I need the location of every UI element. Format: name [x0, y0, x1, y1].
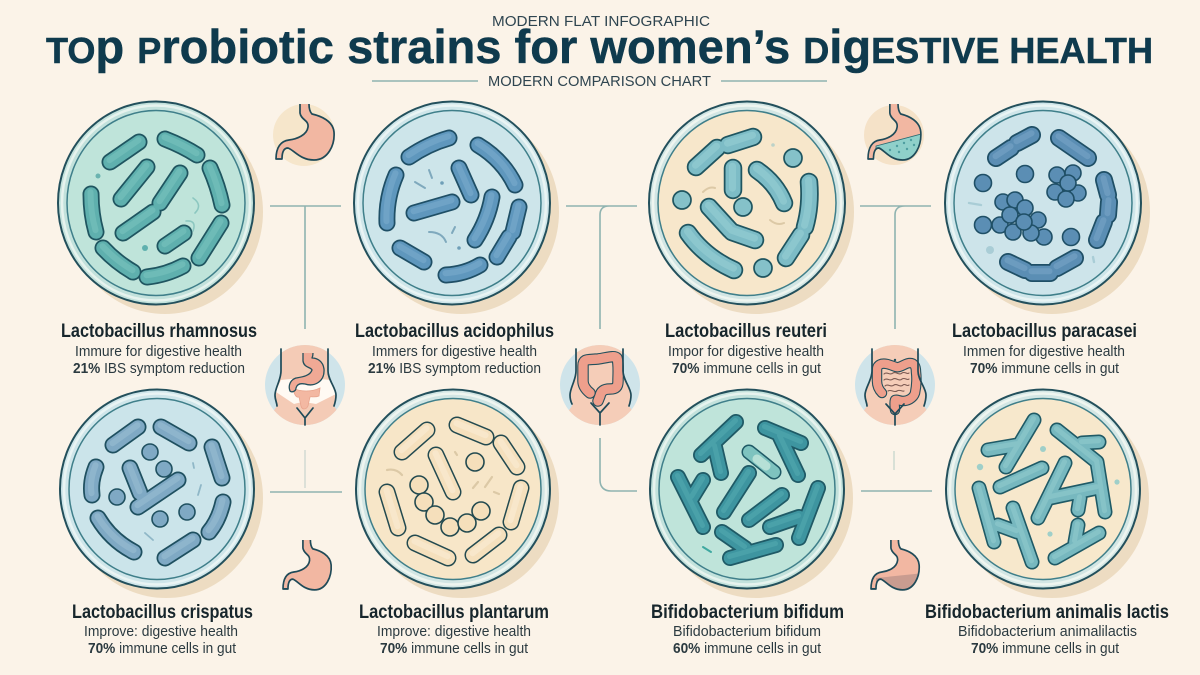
benefit text: Immers for digestive health: [372, 344, 537, 360]
small intestine: [884, 372, 909, 392]
petri dish 6: [356, 390, 559, 598]
petri dish 2: [354, 102, 559, 314]
petri dish 5: [60, 390, 263, 598]
strain name: Lactobacillus reuteri: [665, 320, 827, 342]
icon: female torso with intestines: [855, 345, 935, 426]
panel: Lactobacillus reuteri: [649, 102, 854, 377]
panel: Lactobacillus paracasei: [945, 102, 1150, 377]
petri dish 3: [649, 102, 854, 314]
statistic: 60% immune cells in gut: [673, 641, 821, 657]
panel: Bifidobacterium bifidum: [650, 390, 853, 657]
icon: stomach on beige circle: [273, 104, 335, 166]
panel: Bifidobacterium animalis lactis: [925, 390, 1169, 657]
benefit text: Impor for digestive health: [668, 344, 824, 360]
large intestine: [877, 363, 916, 410]
statistic: 70% immune cells in gut: [88, 641, 236, 657]
statistic: 21% IBS symptom reduction: [73, 361, 245, 377]
strain name: Lactobacillus acidophilus: [355, 320, 554, 342]
strain name: Lactobacillus rhamnosus: [61, 320, 257, 342]
panel: Lactobacillus crispatus: [60, 390, 263, 657]
benefit text: Immure for digestive health: [75, 344, 242, 360]
panel: Lactobacillus acidophilus: [354, 102, 559, 377]
statistic: 21% IBS symptom reduction: [368, 361, 541, 377]
strain name: Bifidobacterium bifidum: [651, 601, 844, 623]
strain name: Lactobacillus paracasei: [952, 320, 1137, 342]
benefit text: Improve: digestive health: [377, 624, 531, 640]
statistic: 70% immune cells in gut: [970, 361, 1119, 377]
petri dish 8: [946, 390, 1149, 598]
strain name: Lactobacillus plantarum: [359, 601, 549, 623]
petri dish 4: [945, 102, 1150, 314]
eyebrow text: MODERN FLAT INFOGRAPHIC: [492, 13, 710, 30]
statistic: 70% immune cells in gut: [672, 361, 821, 377]
petri dish 7: [650, 390, 853, 598]
icon: female torso with colon: [560, 345, 640, 426]
colon: [583, 357, 618, 401]
panel: Lactobacillus plantarum: [356, 390, 559, 657]
icon: female torso with stomach and uterus: [265, 345, 345, 426]
benefit text: Improve: digestive health: [84, 624, 238, 640]
uterus: [293, 388, 320, 409]
icon: stomach lower right: [870, 540, 920, 591]
statistic: 70% immune cells in gut: [380, 641, 528, 657]
statistic: 70% immune cells in gut: [971, 641, 1119, 657]
benefit text: Bifidobacterium bifidum: [673, 624, 821, 640]
subtitle with rules: MODERN COMPARISON CHART: [488, 73, 711, 90]
stomach: [289, 353, 324, 392]
header: [46, 13, 1153, 90]
panel: Lactobacillus rhamnosus: [58, 102, 263, 377]
icon: stomach lower left: [283, 540, 331, 590]
connector lines: [270, 206, 932, 492]
strain name: Lactobacillus crispatus: [72, 601, 253, 623]
petri dish 1: [58, 102, 263, 314]
benefit text: Immen for digestive health: [963, 344, 1125, 360]
icon: stomach with teal contents: [864, 104, 925, 165]
benefit text: Bifidobacterium animalilactis: [958, 624, 1137, 640]
title: TOp Probiotic strains for women’s DigESTIVE HEALTH: [46, 20, 1153, 73]
